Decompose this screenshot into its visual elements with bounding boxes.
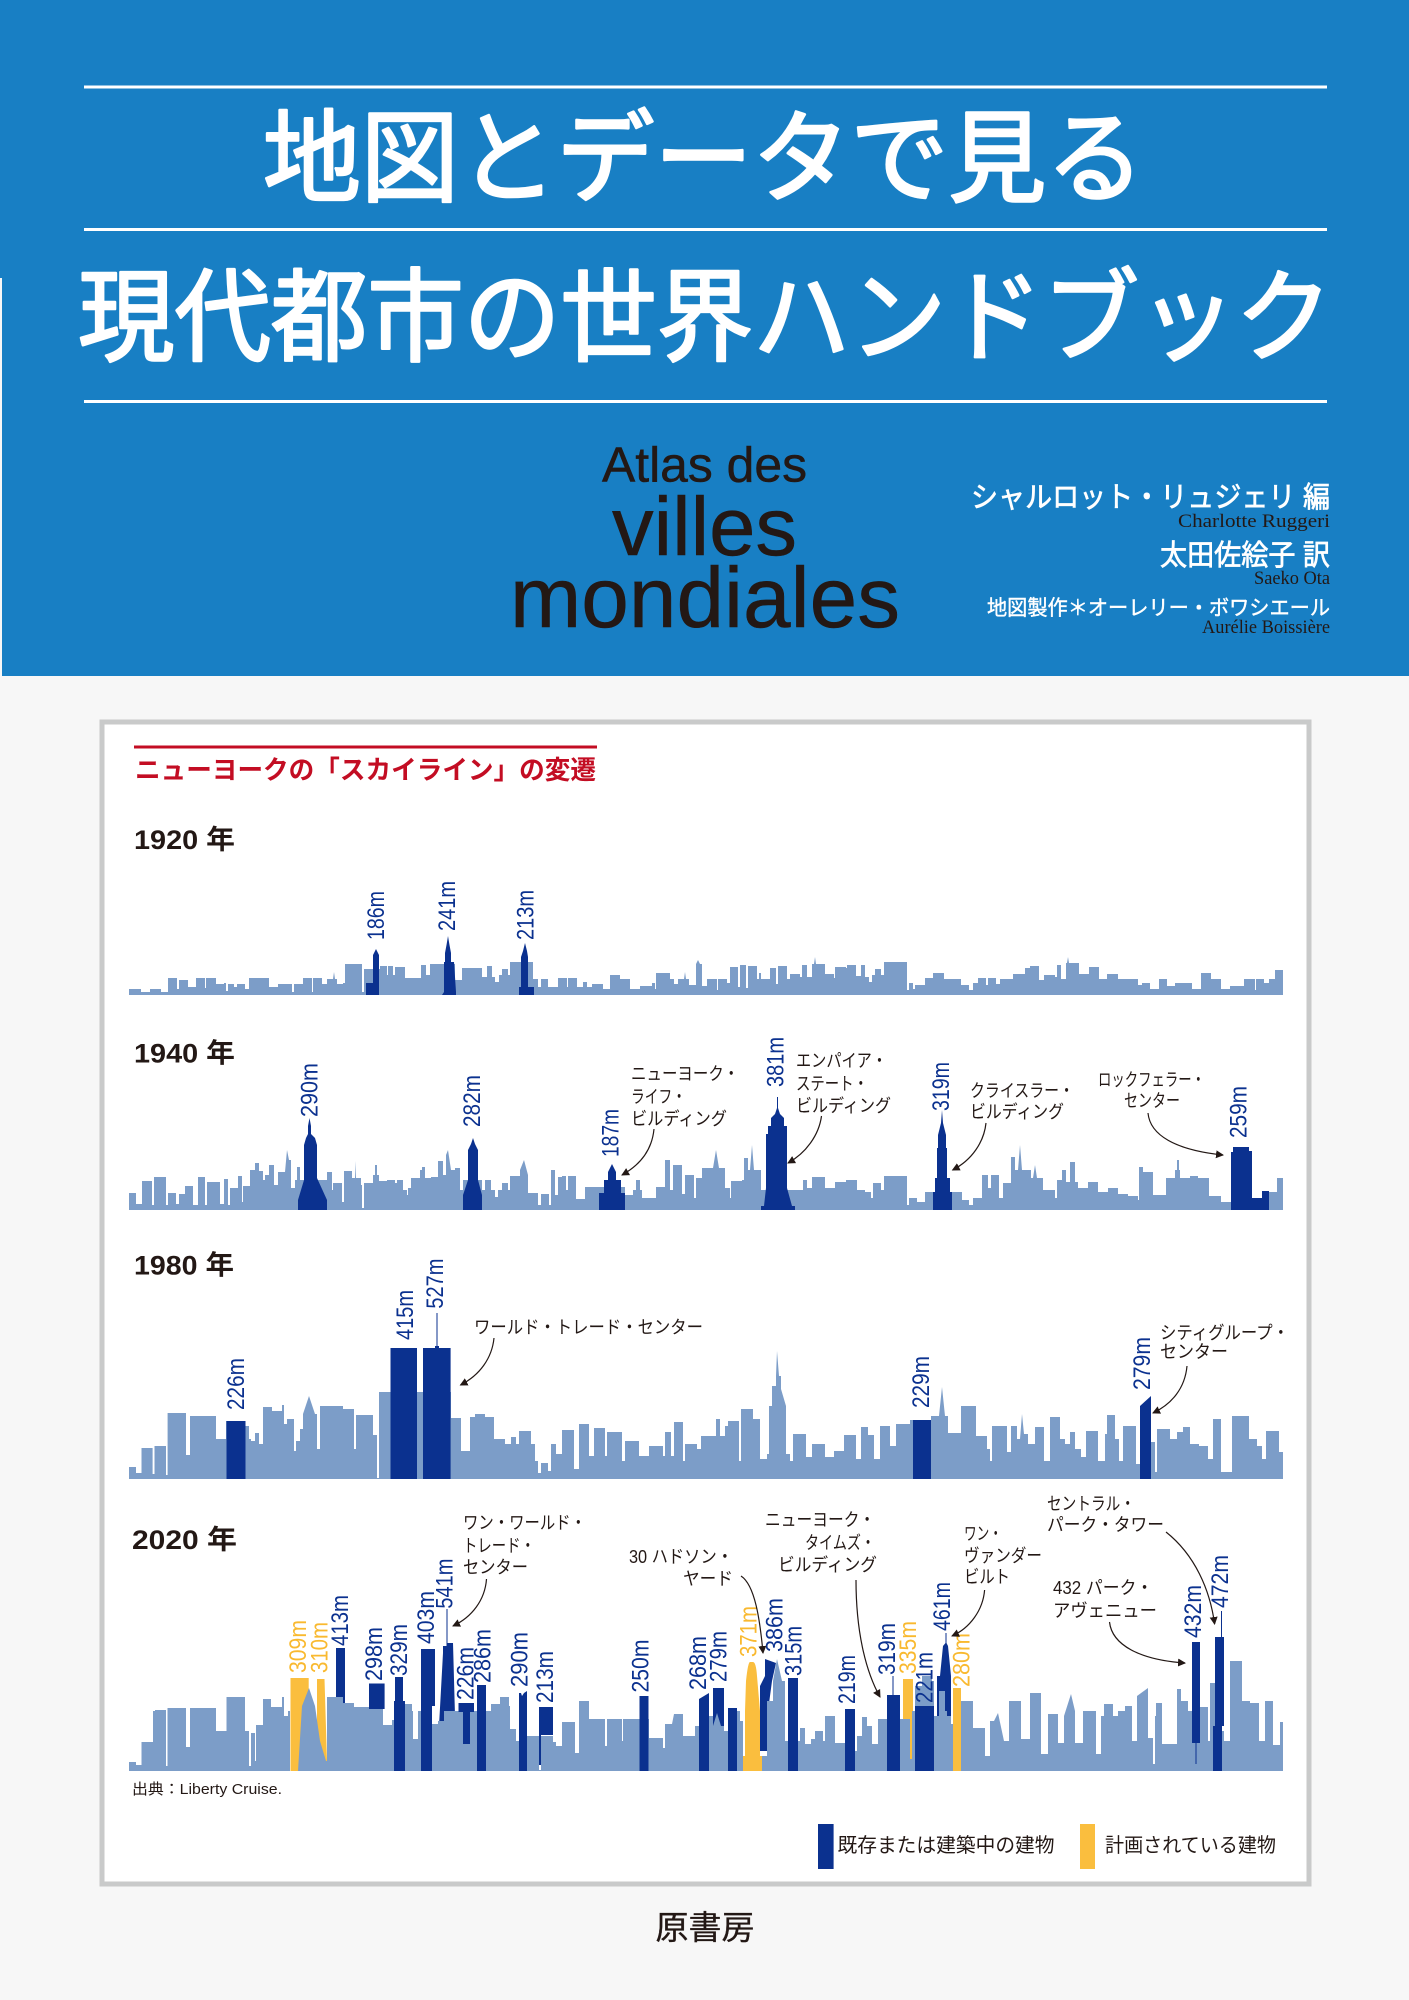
row: 2020: ワン・ワールド・ [463,1513,586,1533]
french title: Atlas des [602,439,807,493]
authors [971,481,1330,638]
row: 2020: 541m [432,1559,459,1609]
row: 1980: 279m [1129,1337,1156,1390]
row: 1980: 229m [908,1356,935,1408]
row: 2020: タイムズ・ [805,1533,875,1553]
row: 2020: 226m [452,1647,480,1700]
row: 2020: 432m [1180,1585,1207,1638]
row: 2020: 403m [413,1591,440,1644]
row: 2020: 298m [361,1627,388,1681]
row: 1940: ビルディング [796,1096,891,1116]
authors: Saeko Ota [1254,569,1330,589]
row: 2020: 386m [762,1598,789,1652]
row: 2020: 2020 年 [132,1525,237,1555]
row: 1980 [129,1251,1289,1479]
row: 1920: 186m [363,891,390,940]
row: 1940: ニューヨーク・ [631,1064,739,1084]
row: 1940 [129,1037,1283,1210]
row: 2020: セントラル・ [1047,1494,1135,1514]
row: 1940: 381m [763,1037,790,1087]
row: 2020: 309m [285,1620,312,1673]
panel: skyline chart [102,722,1309,1884]
row: 2020: 268m [685,1636,712,1690]
row: 1980: シティグループ・ [1160,1323,1289,1343]
row: 2020: 319m [874,1623,901,1675]
row: 2020 [129,1494,1283,1771]
row: 2020: 472m [1207,1555,1234,1608]
french title [510,439,900,646]
authors: シャルロット・リュジェリ 編 [971,481,1330,514]
row: 2020: 280m [949,1633,976,1687]
authors: Aurélie Boissière [1202,618,1330,638]
row: 2020: 213m [532,1651,559,1703]
row: 1940: 282m [459,1075,486,1127]
source note: 出典：Liberty Cruise. [132,1781,282,1798]
chart heading: ニューヨークの「スカイライン」の変遷 [135,755,596,785]
row: 1980: 1980 年 [134,1251,234,1281]
row: 1920: 241m [434,881,461,931]
legend [818,1824,1276,1869]
row: 1920: 1920 年 [134,825,235,855]
row: 1920 [129,825,1283,995]
row: 2020: 279m [706,1631,733,1682]
row: 1980: 527m [422,1259,449,1309]
header band [0,0,1409,676]
row: 2020: 315m [781,1626,808,1676]
row: 2020: ニューヨーク・ [765,1510,875,1530]
row: 1940: ビルディング [631,1109,727,1129]
title: 現代都市の世界ハンドブック [78,263,1332,375]
row: 1940: センター [1124,1091,1180,1111]
authors: Charlotte Ruggeri [1178,512,1330,532]
row: 2020: 286m [470,1629,496,1683]
row: 2020: 250m [628,1640,655,1692]
row: 2020: ヤード [683,1569,733,1589]
authors: 地図製作＊オーレリー・ボワシエール [987,597,1330,620]
row: 2020: 221m [912,1652,939,1703]
row: 1940: 319m [928,1062,955,1111]
row: 2020: 219m [834,1655,861,1704]
row: 1980: 415m [392,1290,419,1340]
row: 2020: トレード・ [463,1536,535,1556]
row: 2020: 310m [307,1622,334,1673]
row: 2020: パーク・タワー [1047,1515,1164,1535]
legend: 計画されている建物 [1105,1834,1276,1857]
row: 1940: ステート・ [796,1074,868,1094]
row: 1940: 1940 年 [134,1039,235,1069]
publisher: 原書房 [656,1909,754,1946]
row: 1940: ロックフェラー・ [1098,1070,1205,1090]
row: 2020: 290m [507,1632,534,1687]
french title: villes [612,480,797,573]
row: 2020: ヴァンダー [964,1546,1042,1566]
row: 2020: 461m [929,1582,956,1631]
row: 2020: 329m [386,1624,413,1676]
row: 1980: センター [1160,1342,1228,1362]
row: 2020: センター [463,1558,528,1578]
row: 2020: 371m [736,1606,763,1657]
row: 1940: 187m [598,1109,624,1157]
row: 2020: 432 パーク・ [1053,1578,1153,1598]
row: 1980: 226m [223,1358,250,1410]
row: 2020: ビルディング [778,1555,877,1575]
row: 1940: クライスラー・ [970,1081,1074,1101]
row: 2020: ワン・ [964,1524,1002,1544]
legend: 既存または建築中の建物 [838,1834,1054,1857]
row: 1940: ビルディング [970,1102,1064,1122]
row: 2020: ビルト [964,1567,1010,1587]
row: 1920: 213m [513,890,540,940]
french title: mondiales [510,551,900,646]
row: 1940: 290m [297,1063,324,1117]
authors: 太田佐絵子 訳 [1160,539,1330,572]
row: 2020: 30 ハドソン・ [629,1547,733,1567]
title: 地図とデータで見る [263,104,1144,216]
row: 1940: エンパイア・ [796,1051,887,1071]
row: 2020: 335m [895,1621,922,1674]
row: 1980: ワールド・トレード・センター [474,1318,703,1338]
row: 2020: アヴェニュー [1053,1601,1157,1621]
row: 2020: 413m [327,1595,354,1646]
row: 1940: 259m [1226,1086,1253,1138]
row: 1940: ライフ・ [631,1087,686,1107]
title [78,104,1332,375]
